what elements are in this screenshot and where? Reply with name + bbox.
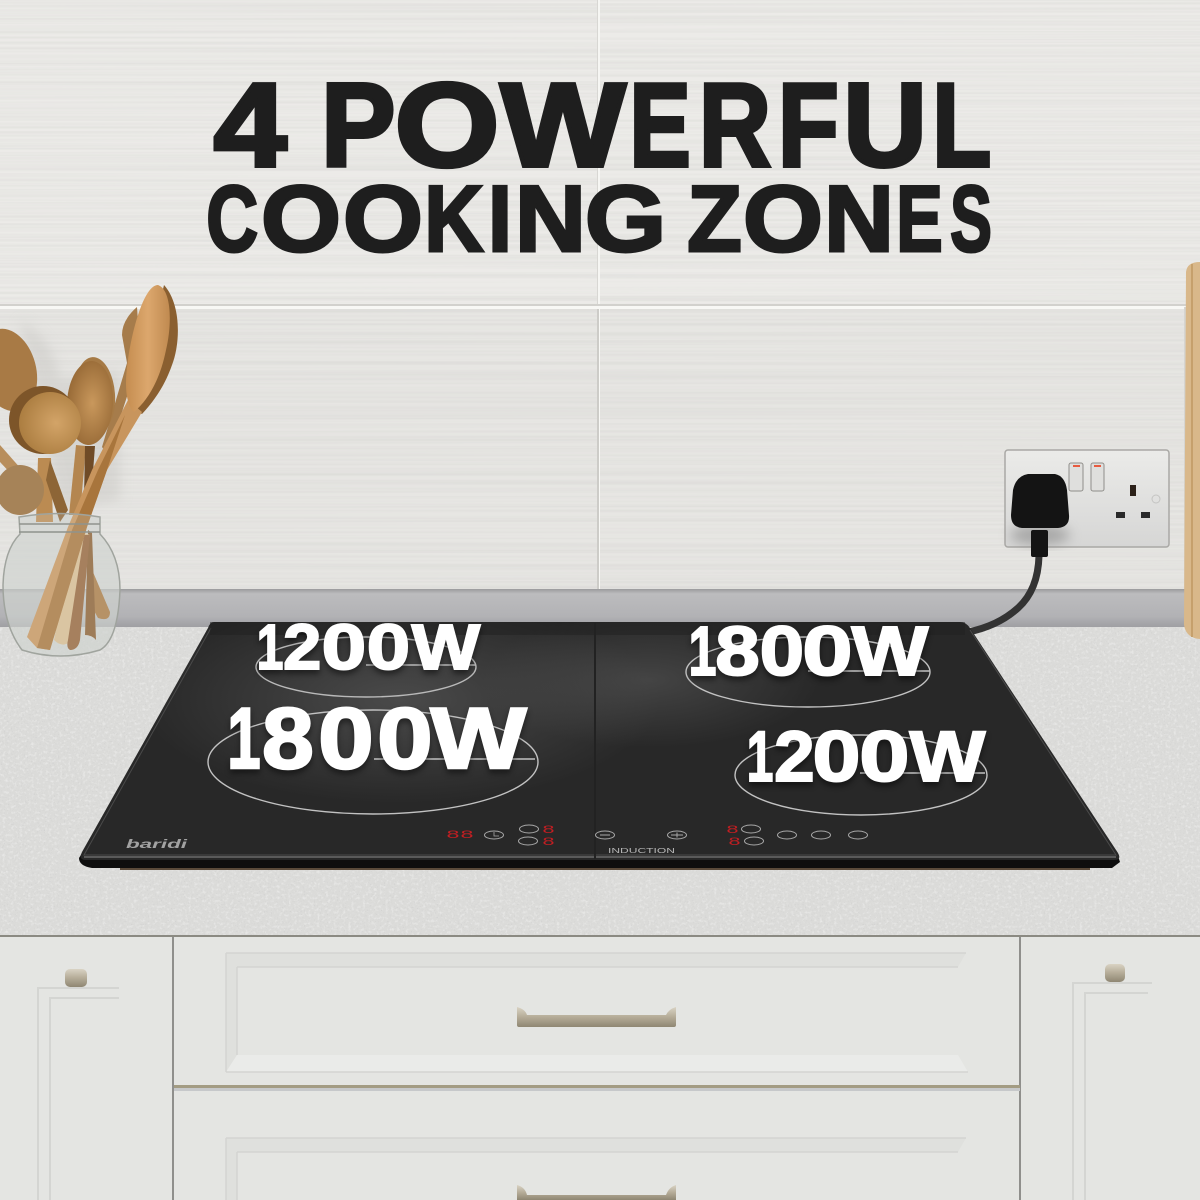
zone ring: front right	[735, 735, 987, 815]
title line 2: E	[896, 166, 943, 271]
switch right	[1091, 463, 1104, 491]
narrow back spoon	[102, 307, 138, 455]
upstand	[0, 589, 1200, 628]
label: front left 1800W: 0	[318, 691, 374, 787]
title line 2: S	[950, 166, 992, 271]
brand logo: baridi	[126, 837, 188, 851]
jar body back	[3, 514, 120, 656]
title line 1: L	[932, 59, 991, 192]
label: rear left 1200W: 1	[257, 611, 283, 683]
drawer gap	[174, 1085, 1020, 1091]
live slot	[1116, 512, 1125, 518]
utensil shadow	[20, 320, 120, 510]
label: front right 1200W: 2	[774, 718, 815, 797]
right control panel: 8	[728, 837, 741, 849]
zone ring: rear left	[256, 637, 476, 697]
lower drawer panel	[226, 1138, 966, 1200]
title line 2: K	[424, 166, 484, 271]
label: rear right 1800W: 8	[715, 612, 760, 690]
label: front left 1800W: 8	[262, 691, 314, 787]
left door panel	[38, 988, 119, 1200]
zone ring: front left	[208, 710, 538, 814]
title line 1: 4	[214, 59, 287, 192]
title line 2: N	[824, 166, 894, 271]
cutting board	[1184, 262, 1200, 639]
left control panel: 8	[542, 825, 555, 837]
cabinets	[0, 935, 1200, 1200]
upper drawer panel	[226, 953, 968, 1072]
label: rear left 1200W: W	[412, 611, 481, 683]
neutral slot	[1141, 512, 1150, 518]
title line 1: F	[778, 59, 839, 192]
jar contents	[88, 565, 110, 619]
handles	[36, 458, 53, 522]
title line 1: P	[321, 59, 396, 192]
title line 2: N	[515, 166, 586, 271]
earth slot	[1130, 485, 1136, 496]
label: rear left 1200W: 0	[322, 611, 366, 683]
big spoon	[27, 285, 170, 650]
label: front left 1800W: 0	[377, 691, 433, 787]
label: front left 1800W: 1	[227, 691, 261, 787]
wattage labels	[227, 611, 985, 797]
title line 2: I	[488, 166, 512, 271]
title line 1: U	[843, 59, 927, 192]
label: front right 1200W: 0	[813, 718, 860, 797]
label: rear right 1800W: 0	[760, 612, 804, 690]
left control panel: 8	[542, 837, 555, 849]
label: rear right 1800W: 0	[802, 612, 852, 690]
label: front right 1200W: W	[910, 718, 985, 797]
jar and wooden utensils	[0, 285, 178, 656]
title line 2: C	[206, 166, 258, 271]
right control panel	[726, 825, 868, 849]
knob left	[65, 969, 87, 987]
label: rear right 1800W: 1	[689, 612, 716, 690]
drawer handle bottom	[517, 1185, 676, 1200]
worktop seal under hob	[120, 868, 1090, 870]
title line 1: R	[699, 59, 771, 192]
title line 2: Z	[687, 166, 742, 271]
left control panel: 88	[446, 830, 474, 842]
label: front right 1200W: 0	[859, 718, 910, 797]
label: front left 1800W: W	[431, 691, 527, 787]
hob glass	[81, 622, 1119, 860]
right door panel	[1073, 983, 1152, 1200]
title line 2: O	[743, 166, 823, 271]
left spoon	[0, 322, 46, 418]
glass jar highlight	[3, 514, 120, 656]
oval spoon	[72, 356, 118, 434]
title line 1: W	[500, 59, 626, 192]
label: front right 1200W: 1	[747, 718, 773, 797]
title line 2: O	[261, 166, 341, 271]
title line 2: G	[585, 166, 666, 271]
label: rear left 1200W: 0	[367, 611, 410, 683]
small oval bowl	[0, 465, 44, 515]
round spoon	[9, 386, 77, 454]
title	[206, 59, 992, 271]
title line 1: E	[630, 59, 691, 192]
induction label: INDUCTION	[608, 848, 675, 855]
label: rear left 1200W: 2	[283, 611, 321, 683]
wall tiles	[0, 0, 1200, 600]
left control panel	[446, 825, 555, 849]
drawer handle top	[517, 1007, 676, 1027]
induction hob	[79, 622, 1120, 870]
zone ring: rear right	[686, 637, 930, 707]
plug and cable	[968, 474, 1070, 632]
title line 2: O	[343, 166, 423, 271]
minus button	[596, 831, 614, 839]
switch left	[1069, 463, 1083, 491]
big spoon back	[134, 285, 178, 414]
wall socket	[1005, 450, 1169, 547]
worktop	[0, 627, 1200, 936]
title line 1: O	[395, 59, 500, 192]
label: rear right 1800W: W	[852, 612, 928, 690]
knob right	[1105, 964, 1125, 982]
hob underside edge	[79, 850, 1120, 868]
plus button	[668, 831, 686, 839]
right control panel: 8	[726, 825, 739, 837]
